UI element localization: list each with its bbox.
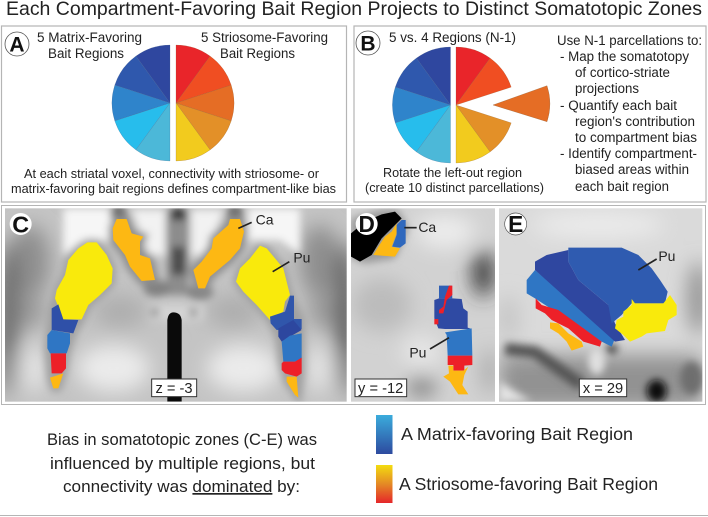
text: N-1 uses list: Use N-1 parcellations to: [557,33,702,48]
legend: matrix-favoring region [376,415,633,454]
pie chart: matrix half [112,45,170,161]
putamen segment [434,286,472,394]
putamen right lower bands [270,296,302,398]
label: Ca [238,211,274,228]
label: Pu: Pu [293,249,310,265]
caudate right [193,219,244,288]
label: Ca [404,219,436,235]
text: N-1 uses list: - Identify compartment- [560,146,697,161]
icon: label D: D [358,211,375,237]
putamen left [55,242,113,319]
panel: B leave-one-out [354,26,706,202]
label: Ca: Ca [418,219,436,235]
legend: striosome-favoring region: A Striosome-favoring Bait Region [399,474,658,494]
heading: matrix regions: Bait Regions [48,46,124,61]
icon: label A [5,32,29,56]
label: Pu: Pu [409,345,426,361]
label: Pu [273,249,310,272]
pie chart: left-out wedge [493,86,550,122]
icon: label C: C [12,211,29,237]
heading: 5 vs 4: 5 vs. 4 Regions (N-1) [389,30,516,45]
text: N-1 uses list: - Quantify each bait [560,98,677,113]
text: rotate region: Rotate the left-out region [383,165,522,180]
panel: A pie overview [2,26,346,202]
text: bias definition [11,166,336,196]
panel: C axial slice [0,205,353,402]
label: Pu: Pu [658,248,675,264]
label: x = 29: x = 29 [583,381,623,397]
pie chart: striosome half with gap [456,47,511,163]
icon: label E: E [508,211,523,237]
label: Ca: Ca [256,211,274,227]
putamen bands [527,248,677,351]
heading: matrix regions: 5 Matrix-Favoring [37,30,142,45]
heading: matrix regions [37,30,142,61]
heading: striosome regions [201,30,328,61]
legend: matrix-favoring region: A Matrix-favoring Bait Region [401,424,633,444]
label: Pu [409,338,449,361]
label: y = -12: y = -12 [358,381,403,397]
text: N-1 uses list: region's contribution [575,114,695,129]
pie chart: striosome half [176,45,234,161]
legend: striosome-favoring region [376,465,658,503]
panel frame: brain images [2,206,706,404]
text: summary statement: influenced by multiple regions, but [50,454,315,473]
icon: label A: A [9,34,25,56]
caudate segment [373,220,406,257]
putamen right [236,246,290,320]
text: bias definition: At each striatal voxel, connectivity with striosome- or [24,166,320,181]
text: rotate region [365,165,544,195]
text: N-1 uses list: projections [575,81,639,96]
text: summary statement: connectivity was dominated by: [63,477,300,496]
putamen left lower bands [47,304,78,388]
label: z = -3: z = -3 [155,381,193,397]
text: summary statement [47,430,317,496]
panel: D coronal slice [351,208,498,402]
text: N-1 uses list: - Map the somatotopy [560,49,689,64]
panel: E sagittal slice [498,208,708,408]
text: bias definition: matrix-favoring bait regions defines compartment-like bias [11,181,336,196]
text: N-1 uses list: biased areas within [575,162,689,177]
text: N-1 uses list: to compartment bias [575,130,697,145]
text: N-1 uses list: each bait region [575,179,669,194]
caudate left [113,219,155,281]
icon: label B: B [360,32,376,56]
text: summary statement: Bias in somatotopic zones (C-E) was [47,430,317,449]
heading: striosome regions: Bait Regions [220,46,295,61]
pie chart: matrix half [392,47,450,163]
icon: label E [505,211,527,237]
text: N-1 uses list [557,33,702,194]
heading: striosome regions: 5 Striosome-Favoring [201,30,328,45]
text: rotate region: (create 10 distinct parcellations) [365,180,544,195]
icon: label B [356,31,380,56]
label: Pu [638,248,675,270]
text: N-1 uses list: of cortico-striate [575,65,670,80]
